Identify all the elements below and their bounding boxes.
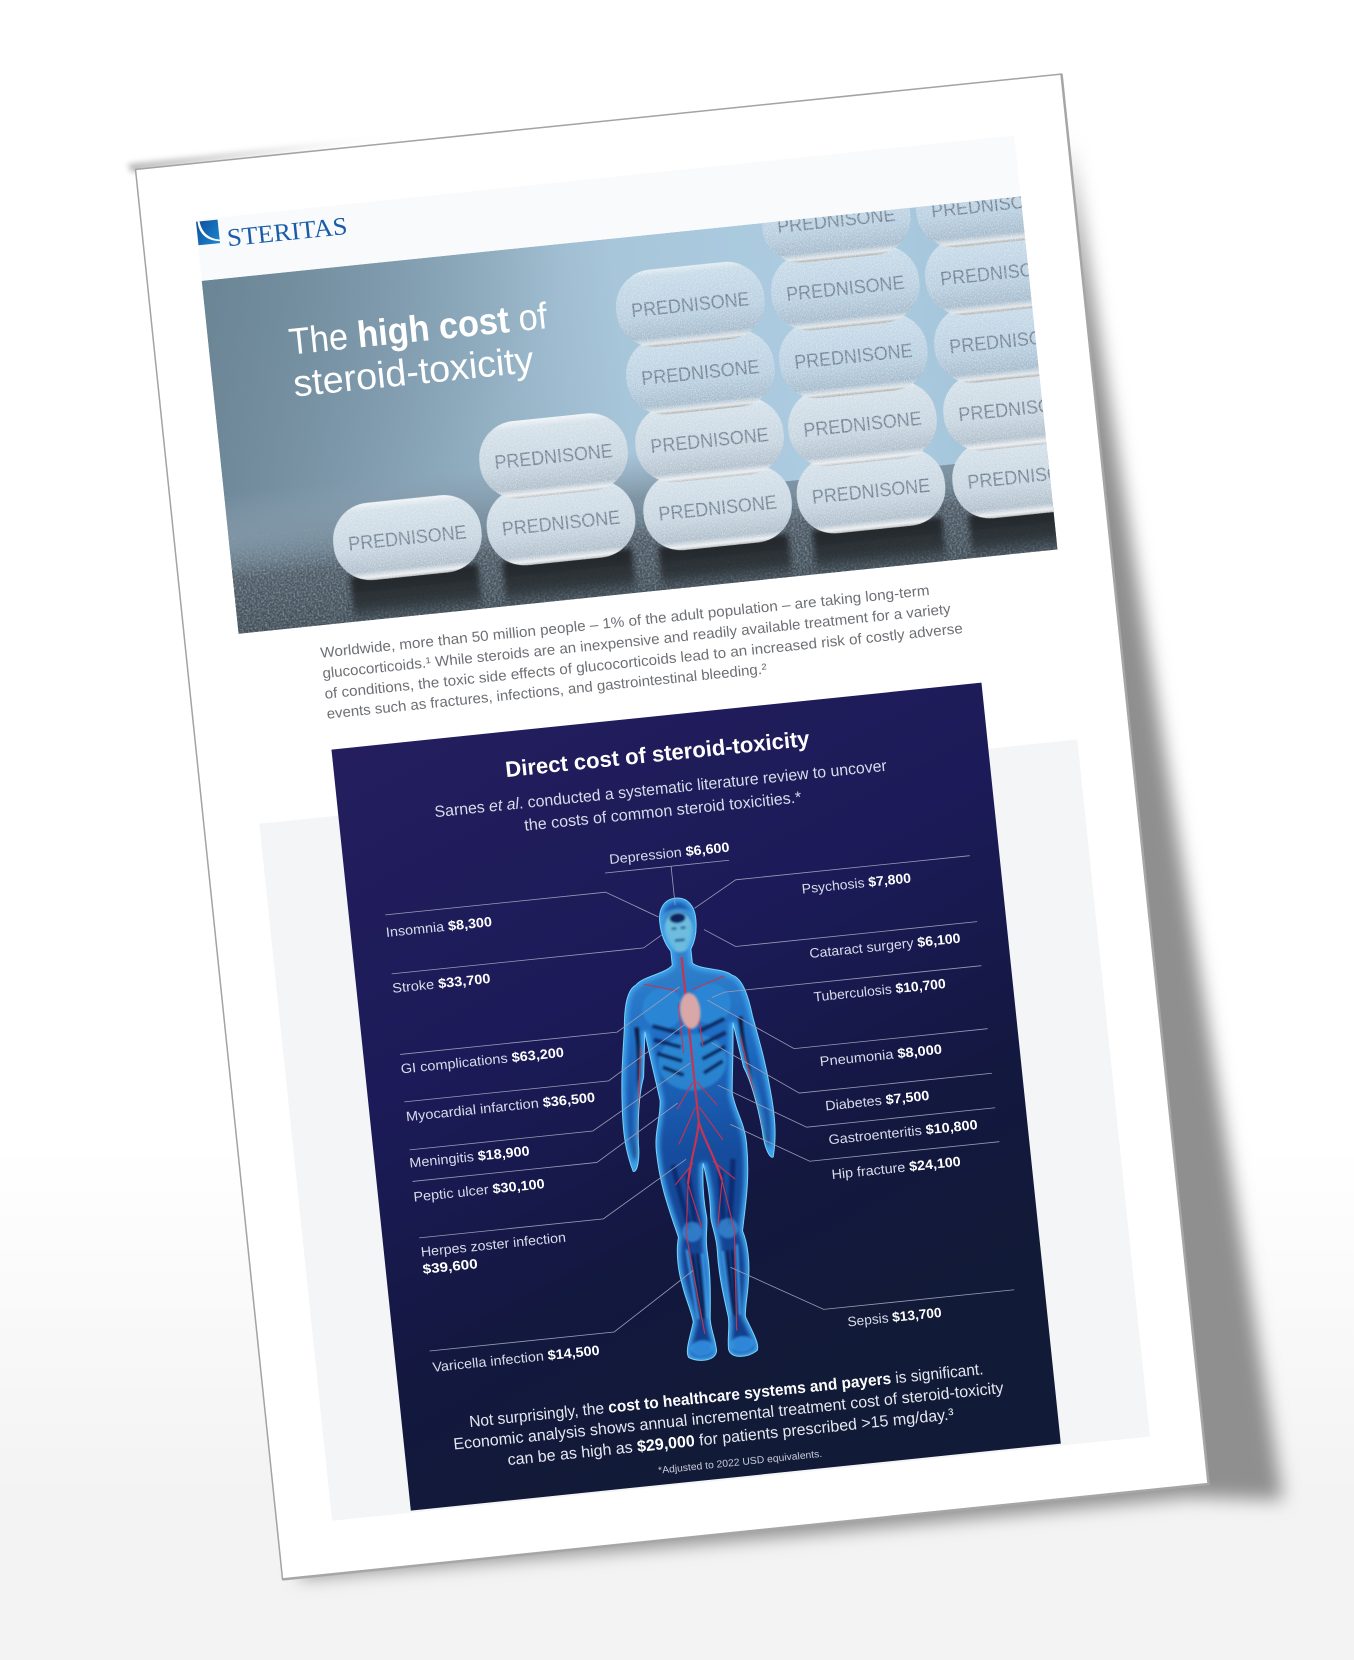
- cost labels: Herpes zoster infection: [420, 1230, 567, 1260]
- logo: Steritas: [196, 206, 349, 255]
- intro paragraph: Worldwide, more than 50 million people – 1% of the adult population – are taking long-term: [320, 583, 930, 662]
- cost labels: $39,600: [422, 1256, 478, 1277]
- light grey backing panel: [259, 739, 1150, 1521]
- panel subheading: Sarnes et al. conducted a systematic literature review to uncover: [434, 757, 888, 821]
- icon: logo mark: [196, 220, 220, 245]
- pill stack: four: PREDNISONE: [650, 425, 770, 458]
- intro paragraph: glucocorticoids.¹ While steroids are an inexpensive and readily available treatment for a variety: [322, 602, 952, 682]
- pill stack: clipped right column: PREDNISONE: [930, 190, 1050, 223]
- pill stack: four: PREDNISONE: [630, 289, 751, 322]
- page sheet: [136, 74, 1209, 1579]
- pill stack: two: PREDNISONE: [494, 441, 614, 474]
- cost labels: [379, 817, 1000, 1375]
- pill stack: two: PREDNISONE: [501, 508, 621, 541]
- cost labels: Diabetes $7,500: [825, 1088, 930, 1114]
- hero photo: stacks of prednisone pills: [202, 196, 1058, 634]
- header band: [195, 135, 1021, 281]
- footnote: *Adjusted to 2022 USD equivalents.: [658, 1449, 823, 1477]
- logo wordmark: STERITAS: [226, 213, 349, 252]
- cost labels: Meningitis $18,900: [409, 1143, 530, 1171]
- cost labels: Gastroenteritis $10,800: [828, 1117, 978, 1147]
- pill stack: clipped right column: [916, 196, 1054, 519]
- pill stack: five: [762, 208, 946, 534]
- cost labels: Cataract surgery $6,100: [809, 931, 961, 961]
- pill stack: two: [475, 410, 639, 569]
- pill stack: four: PREDNISONE: [640, 357, 761, 390]
- intro paragraph: [320, 580, 966, 723]
- intro paragraph: of conditions, the toxic side effects of glucocorticoids lead to an increased risk of costly adverse: [324, 621, 964, 703]
- pill stack: clipped right column: PREDNISONE: [967, 461, 1087, 494]
- pill stack: clipped right column: PREDNISONE: [948, 325, 1069, 358]
- pill stack: five: PREDNISONE: [793, 341, 914, 374]
- pill stack: five: PREDNISONE: [811, 476, 931, 509]
- head detail: [662, 900, 694, 953]
- title: steroid-toxicity: [291, 338, 536, 405]
- pill stack: five: PREDNISONE: [803, 409, 923, 442]
- body rim glow: [622, 898, 775, 1360]
- title: [287, 294, 554, 405]
- red arteries: [637, 957, 762, 1334]
- conclusion text: can be as high as $29,000 for patients prescribed >15 mg/day.³: [507, 1405, 955, 1469]
- pill: single: [332, 494, 482, 580]
- conclusion text: [450, 1358, 1007, 1475]
- pill stack: five: PREDNISONE: [785, 273, 906, 306]
- pill stack: five: PREDNISONE: [776, 205, 896, 238]
- conclusion text: Not surprisingly, the cost to healthcare systems and payers is significant.: [468, 1360, 984, 1431]
- panel: direct cost of steroid-toxicity: [331, 683, 1061, 1511]
- pill reflections: [350, 503, 1073, 622]
- callout lines: [382, 836, 1016, 1351]
- cost labels: Varicella infection $14,500: [432, 1343, 600, 1375]
- human body illustration: [621, 898, 776, 1361]
- intro paragraph: events such as fractures, infections, and gastrointestinal bleeding.²: [326, 661, 768, 723]
- cost labels: Stroke $33,700: [392, 971, 491, 996]
- cost labels: Pneumonia $8,000: [819, 1042, 943, 1069]
- pill stack: four: PREDNISONE: [658, 493, 778, 526]
- heart: [678, 992, 702, 1030]
- tilted flyer page: [136, 74, 1209, 1579]
- page drop shadow: [128, 137, 1283, 1578]
- cost labels: Tuberculosis $10,700: [813, 976, 946, 1005]
- pill stack: clipped right column: PREDNISONE: [958, 393, 1078, 426]
- cost labels: GI complications $63,200: [400, 1045, 565, 1077]
- cost labels: Peptic ulcer $30,100: [413, 1176, 545, 1205]
- panel subheading: the costs of common steroid toxicities.*: [523, 788, 802, 835]
- panel heading: Direct cost of steroid-toxicity: [504, 726, 811, 782]
- cost labels: Sepsis $13,700: [847, 1305, 942, 1329]
- conclusion text: Economic analysis shows annual incremental treatment cost of steroid-toxicity: [453, 1379, 1004, 1454]
- cost labels: Hip fracture $24,100: [831, 1154, 961, 1182]
- title: The high cost of: [287, 294, 550, 363]
- pill stack: four: [612, 258, 796, 554]
- cost labels: Myocardial infarction $36,500: [405, 1090, 596, 1124]
- cost labels: Psychosis $7,800: [801, 870, 912, 897]
- cost labels: Insomnia $8,300: [385, 914, 493, 940]
- cost labels: Depression $6,600: [609, 840, 730, 867]
- pill: single: PREDNISONE: [347, 523, 468, 556]
- pill stack: clipped right column: PREDNISONE: [939, 257, 1060, 291]
